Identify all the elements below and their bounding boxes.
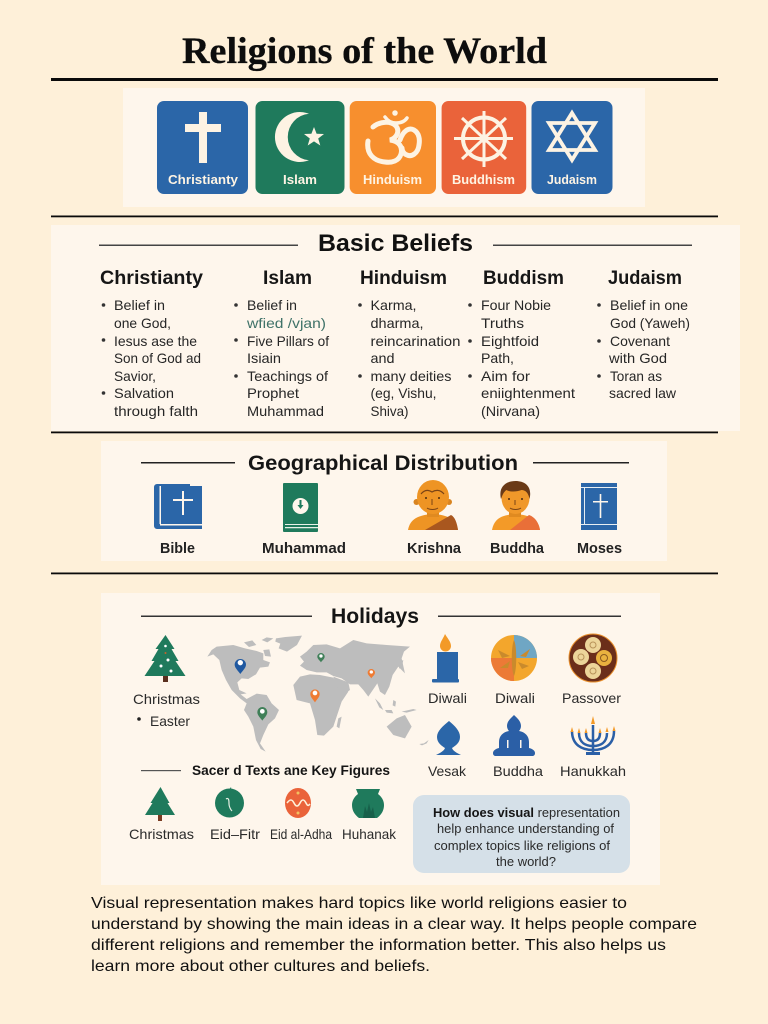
icon: Christmas tree bbox=[144, 635, 186, 682]
panel: geographical distribution bbox=[101, 441, 667, 561]
column: Christianity: Christianty bbox=[100, 268, 203, 289]
text block: answer paragraph bbox=[91, 895, 697, 975]
label: Diwali 2: Diwali bbox=[495, 690, 535, 706]
column: Judaism: Covenant bbox=[610, 333, 670, 349]
column: Hinduism bbox=[358, 268, 460, 419]
icon: green ornament bbox=[215, 787, 244, 818]
map pin: North America bbox=[235, 659, 246, 674]
label: Buddha: Buddha bbox=[490, 540, 545, 557]
icon: small tree bbox=[145, 787, 175, 821]
heading: Holidays: Holidays bbox=[331, 605, 419, 628]
column: Christianity bbox=[100, 268, 203, 419]
icon: green book bbox=[283, 483, 318, 532]
column: Buddhism: Path, bbox=[481, 350, 514, 366]
heading: Basic Beliefs: Basic Beliefs bbox=[318, 230, 473, 257]
column: Islam: Muhammad bbox=[247, 403, 324, 419]
icon: Krishna figure bbox=[408, 480, 458, 530]
icon: Bible bbox=[154, 484, 202, 529]
label: Muhammad: Muhammad bbox=[262, 540, 346, 557]
column: Hinduism: Shiva) bbox=[370, 403, 408, 419]
icon: crescent and star bbox=[275, 112, 324, 162]
icon: cross bbox=[185, 112, 221, 163]
tile: Judaism bbox=[532, 101, 612, 194]
panel: religion symbols bbox=[123, 88, 645, 207]
tile: Judaism: Judaism bbox=[547, 172, 597, 187]
column: Buddhism: eniightenment bbox=[481, 385, 575, 401]
map pin: Asia bbox=[368, 669, 375, 678]
tile: Islam bbox=[256, 101, 344, 194]
icon: decorated egg bbox=[285, 788, 311, 818]
column: Judaism: Belief in one bbox=[610, 297, 688, 313]
column: Hinduism: and bbox=[370, 350, 394, 366]
text block: answer paragraph: learn more about other cultures and beliefs. bbox=[91, 958, 430, 975]
icon: om bbox=[368, 112, 419, 162]
column: Hinduism: Karma, bbox=[370, 297, 416, 313]
map pin: South America bbox=[257, 707, 267, 721]
text block: answer paragraph: different religions and remember the information better. This also helps us bbox=[91, 937, 666, 954]
callout: question: help enhance understanding of bbox=[437, 821, 614, 836]
callout: question: complex topics like religions of bbox=[434, 838, 610, 853]
column: Buddhism: Aim for bbox=[481, 368, 530, 384]
tile: Buddhism bbox=[442, 101, 526, 194]
label: Christmas: Christmas bbox=[133, 691, 200, 707]
column: Hinduism: dharma, bbox=[370, 315, 424, 331]
label: Christmas: Christmas bbox=[129, 826, 194, 842]
icon: Moses book bbox=[581, 483, 617, 530]
panel: holidays bbox=[101, 593, 660, 885]
column: Islam: Prophet bbox=[247, 385, 299, 401]
column: Hinduism: reincarination bbox=[370, 333, 460, 349]
icon: star of David bbox=[549, 113, 595, 160]
column: Islam: Isiain bbox=[247, 350, 281, 366]
label: Hanukkah: Hanukkah bbox=[560, 763, 626, 779]
heading: Sacred Texts and Key Figures: Sacer d Texts ane Key Figures bbox=[192, 762, 390, 778]
column: Buddhism: (Nirvana) bbox=[481, 403, 540, 419]
column: Islam: Teachings of bbox=[247, 368, 328, 384]
title: Religions of the World bbox=[182, 31, 547, 72]
text block: answer paragraph: Visual representation makes hard topics like world religions easier to bbox=[91, 895, 627, 912]
label: Buddha: Buddha bbox=[493, 763, 543, 779]
column: Islam: wfied /vjan) bbox=[246, 315, 326, 331]
label: Bible: Bible bbox=[160, 540, 195, 557]
column: Christianity: Salvation bbox=[114, 385, 174, 401]
tile: Hinduism: Hinduism bbox=[363, 172, 422, 187]
column: Christianity: Iesus ase the bbox=[114, 333, 197, 349]
column: Christianity: Son of God ad bbox=[114, 350, 201, 366]
label: Diwali: Diwali bbox=[428, 690, 467, 706]
world map bbox=[207, 636, 429, 752]
column: Hinduism: many deities bbox=[370, 368, 452, 384]
map pin: Europe bbox=[317, 653, 325, 662]
column: Buddhism: Buddism bbox=[483, 268, 564, 289]
icon: Buddha figure bbox=[492, 481, 540, 530]
column: Buddhism: Eightfoid bbox=[481, 333, 539, 349]
column: Judaism: Toran as bbox=[610, 368, 662, 384]
callout: question bbox=[413, 795, 630, 873]
column: Judaism: sacred law bbox=[609, 385, 677, 401]
icon: dharma wheel bbox=[454, 111, 513, 167]
tile: Islam: Islam bbox=[283, 172, 317, 187]
tile: Christianity bbox=[157, 101, 248, 194]
icon: Passover plate bbox=[569, 634, 617, 682]
column: Judaism bbox=[597, 268, 690, 401]
icon: candle bbox=[432, 634, 459, 682]
label: Krishna: Krishna bbox=[407, 540, 462, 557]
column: Judaism: Judaism bbox=[608, 268, 682, 289]
column: Islam: Islam bbox=[263, 268, 312, 289]
icon: menorah bbox=[570, 716, 616, 755]
column: Buddhism: Four Nobie bbox=[481, 297, 551, 313]
column: Judaism: God (Yaweh) bbox=[610, 315, 690, 331]
map pin: Africa bbox=[310, 689, 320, 702]
tile: Buddhism: Buddhism bbox=[452, 172, 515, 187]
column: Buddhism bbox=[468, 268, 575, 419]
heading: Geographical Distribution: Geographical Distribution bbox=[248, 452, 518, 475]
label: Easter: Easter bbox=[150, 713, 190, 729]
column: Islam: Five Pillars of bbox=[247, 333, 329, 349]
column: Buddhism: Truths bbox=[481, 315, 524, 331]
icon: Diwali rangoli bbox=[491, 635, 537, 681]
column: Hinduism: Hinduism bbox=[360, 268, 447, 289]
column: Christianity: Belief in bbox=[114, 297, 165, 313]
label: Eid al-Adha: Eid al-Adha bbox=[270, 826, 332, 842]
column: Christianity: one God, bbox=[114, 315, 171, 331]
tile: Christianity: Christianty bbox=[168, 172, 239, 187]
column: Islam: Belief in bbox=[247, 297, 297, 313]
callout: question: How does visual representation bbox=[433, 805, 620, 820]
text block: answer paragraph: understand by showing the main ideas in a clear way. It helps people compare bbox=[91, 916, 697, 933]
column: Christianity: Savior, bbox=[114, 368, 156, 384]
panel: basic beliefs bbox=[51, 225, 740, 431]
column: Islam bbox=[234, 268, 329, 419]
column: Christianity: through falth bbox=[114, 403, 198, 419]
label: Passover: Passover bbox=[562, 690, 621, 706]
label: Vesak: Vesak bbox=[428, 763, 467, 779]
icon: Buddha statue bbox=[493, 715, 535, 756]
column: Hinduism: (eg, Vishu, bbox=[370, 385, 436, 401]
column: Judaism: with God bbox=[608, 350, 667, 366]
label: Eid-Fitr: Eid–Fitr bbox=[210, 826, 260, 842]
label: Moses: Moses bbox=[577, 540, 622, 557]
icon: green pot bbox=[352, 789, 384, 818]
label: Huhanak: Huhanak bbox=[342, 826, 397, 842]
tile: Hinduism bbox=[350, 101, 436, 194]
callout: question: the world? bbox=[496, 854, 556, 869]
icon: Vesak lotus bbox=[436, 721, 461, 755]
